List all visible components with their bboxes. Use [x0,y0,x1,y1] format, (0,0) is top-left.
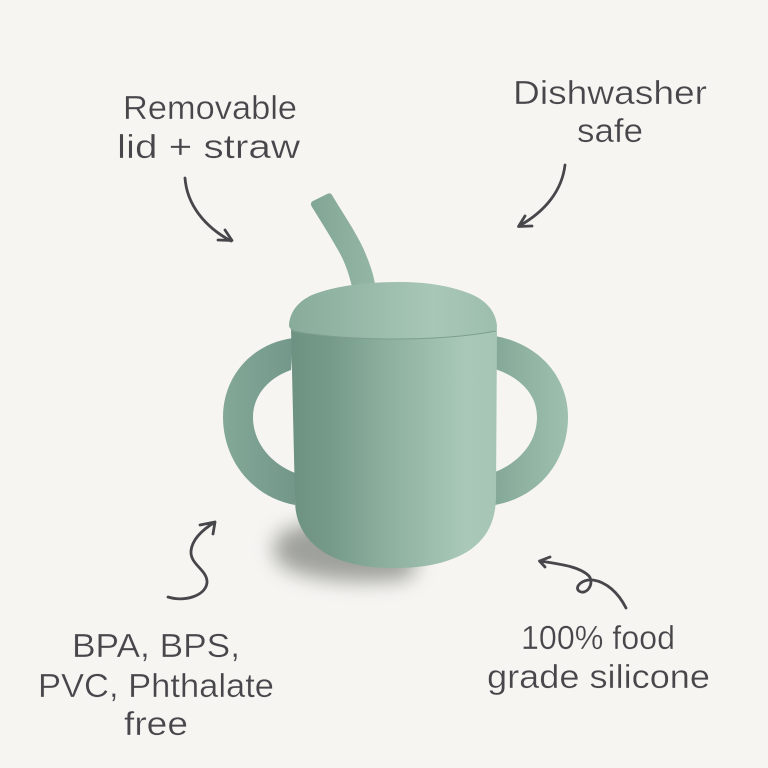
label: 100% food grade silicone: 100% food [521,619,675,656]
straw [311,193,375,287]
left handle [223,338,295,505]
label: BPA free: BPA, BPS, [72,627,240,664]
lid [289,282,497,339]
label: BPA free: PVC, Phthalate [38,667,274,704]
product photo: sippy cup [223,193,568,582]
label: 100% food grade silicone: grade silicone [487,658,710,695]
right handle [495,336,568,505]
lid seam [291,331,496,339]
label: dishwasher safe: safe [577,112,643,149]
arrow: to cup from BPA label [168,522,215,599]
label: removable lid and straw: lid + straw [117,128,300,165]
arrow: to lid and straw [185,178,232,241]
label: removable lid and straw [117,89,300,165]
label: BPA free: free [124,705,188,742]
arrow: to cup from dishwasher label [518,165,565,226]
label: dishwasher safe: Dishwasher [513,74,707,111]
label: dishwasher safe [513,74,707,149]
arrow: to cup from silicone label [540,557,626,608]
label: BPA free [38,627,274,742]
label: 100% food grade silicone [487,619,710,695]
label: removable lid and straw: Removable [123,89,297,126]
cup shadow [274,520,420,582]
cup body [291,328,497,568]
